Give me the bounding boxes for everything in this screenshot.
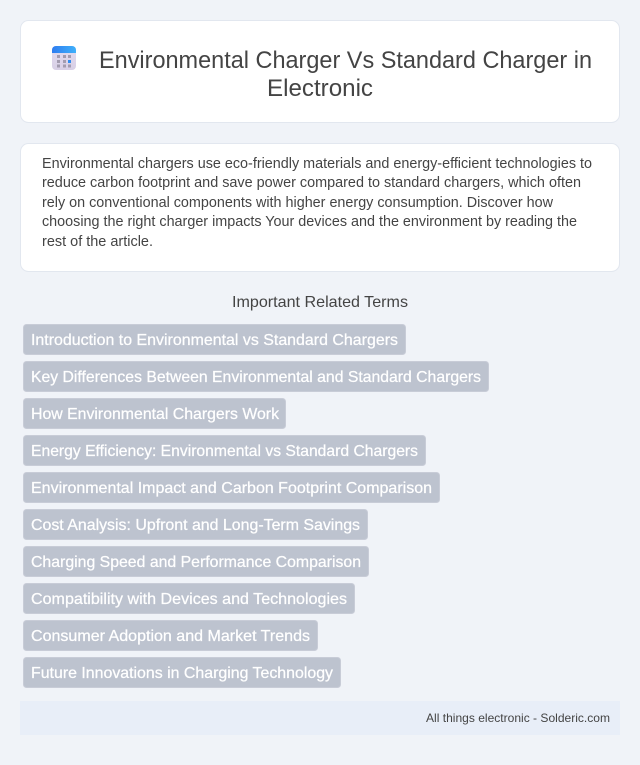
tag 5: Environmental Impact and Carbon Footprint Comparison bbox=[31, 480, 432, 497]
tag 8: Compatibility with Devices and Technologies bbox=[31, 591, 347, 608]
tag 4: Energy Efficiency: Environmental vs Standard Chargers bbox=[31, 443, 418, 460]
tag 10: Future Innovations in Charging Technology bbox=[31, 665, 333, 682]
title bbox=[99, 47, 592, 102]
tag 1: Introduction to Environmental vs Standard Chargers bbox=[31, 332, 398, 349]
tag 5 bbox=[24, 472, 440, 502]
panel: intro description bbox=[20, 144, 620, 272]
intro paragraph bbox=[42, 156, 592, 250]
intro paragraph: rely on conventional components with higher energy consumption. Discover how bbox=[42, 195, 554, 211]
intro paragraph: choosing the right charger impacts Your devices and the environment by reading the bbox=[42, 214, 577, 230]
tag 9 bbox=[24, 620, 318, 650]
tag 10 bbox=[24, 658, 340, 688]
tag 1 bbox=[24, 324, 406, 354]
panel: title card bbox=[20, 20, 620, 122]
icon: calendar bbox=[52, 46, 76, 70]
footer credit: All things electronic - Solderic.com bbox=[426, 711, 610, 725]
tag 9: Consumer Adoption and Market Trends bbox=[31, 628, 310, 645]
intro paragraph: rest of the article. bbox=[42, 234, 153, 250]
title: Environmental Charger Vs Standard Charger in bbox=[99, 47, 592, 74]
tag 7: Charging Speed and Performance Comparison bbox=[31, 554, 361, 571]
tag 3 bbox=[24, 398, 286, 428]
tag 8 bbox=[24, 584, 354, 614]
intro paragraph: reduce carbon footprint and save power compared to standard chargers, which often bbox=[42, 175, 581, 191]
tag 2 bbox=[24, 362, 488, 392]
tag 3: How Environmental Chargers Work bbox=[31, 406, 280, 423]
list of related term tags bbox=[24, 324, 488, 688]
tag 4 bbox=[24, 436, 426, 466]
tag 2: Key Differences Between Environmental and Standard Chargers bbox=[31, 369, 481, 386]
tag 6 bbox=[24, 510, 368, 540]
tag 6: Cost Analysis: Upfront and Long-Term Savings bbox=[31, 517, 360, 534]
title: Electronic bbox=[267, 75, 373, 102]
footer bar bbox=[20, 701, 620, 735]
tag 7 bbox=[24, 546, 368, 576]
heading: important related terms: Important Related Terms bbox=[232, 294, 408, 311]
intro paragraph: Environmental chargers use eco-friendly materials and energy-efficient technologies to bbox=[42, 156, 592, 172]
